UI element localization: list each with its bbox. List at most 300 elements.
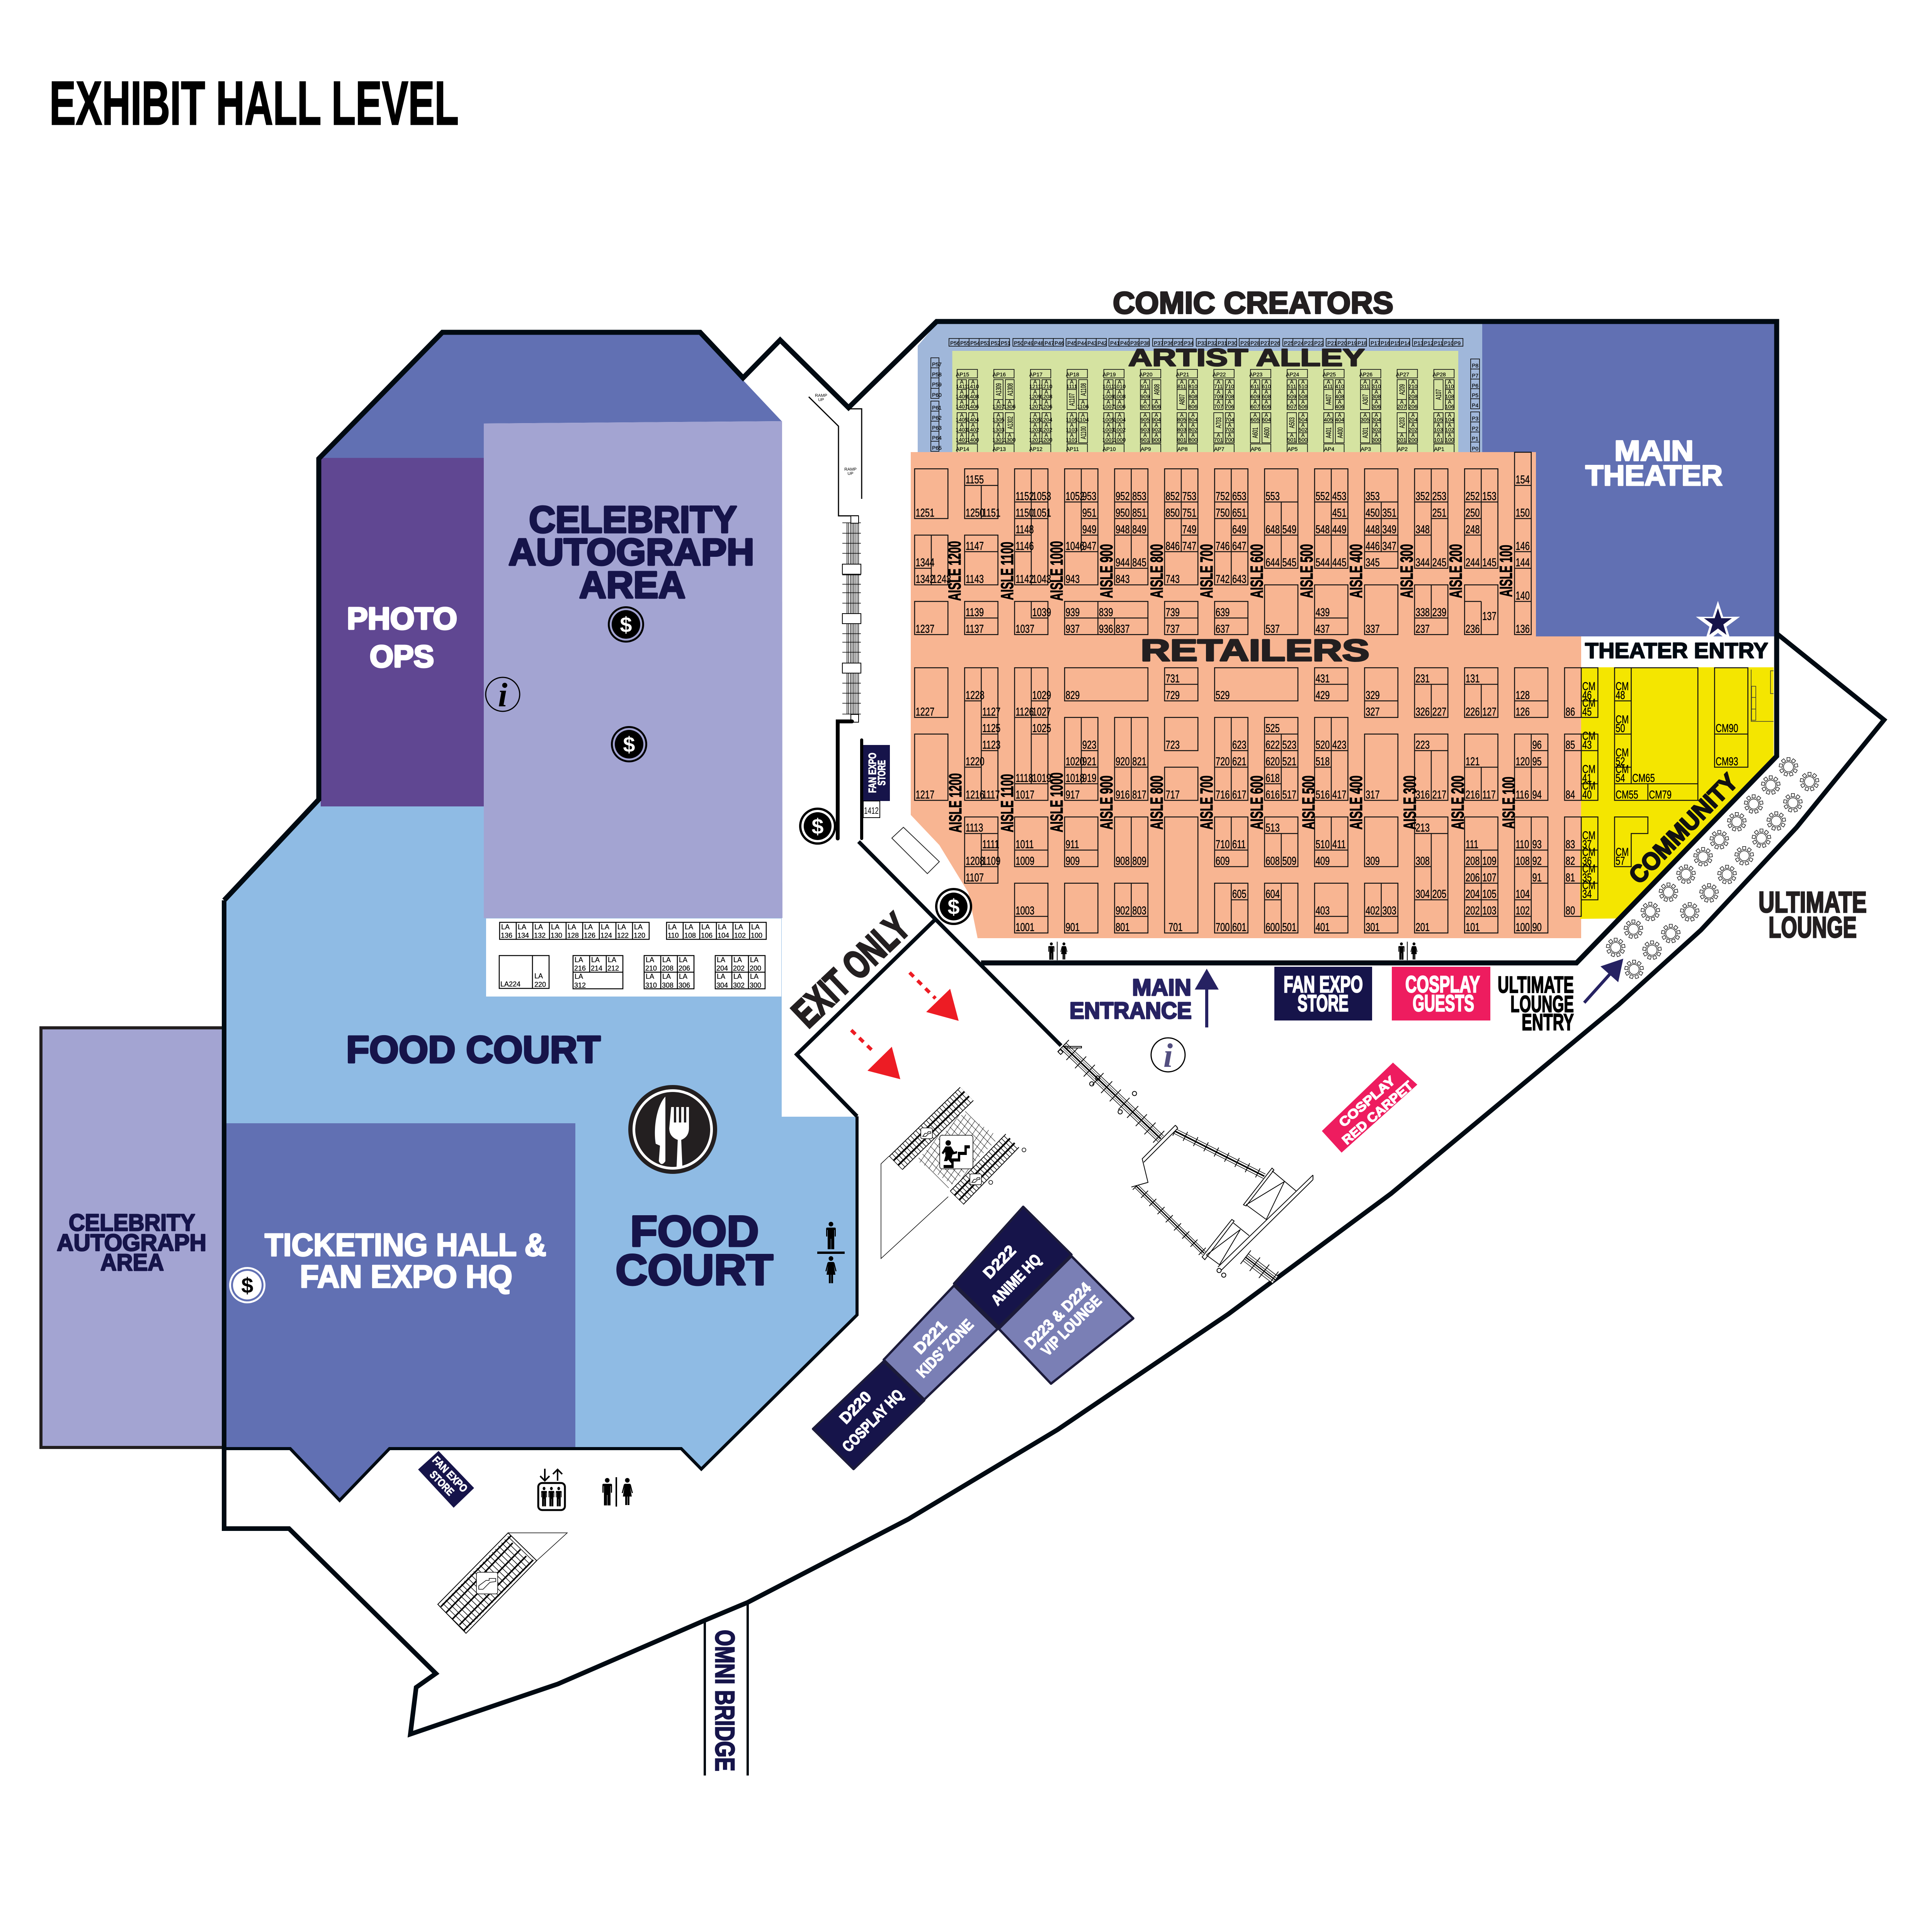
artist alley booths: 702 [1225, 427, 1234, 433]
retailer and community booth numbers: 1151 [982, 507, 1000, 519]
retailer and community booth numbers: 1107 [966, 872, 984, 884]
zone: D220 cosplay hq [813, 1361, 924, 1469]
zone: D223 and D224 vip lounge: D223 & D224 [1022, 1279, 1095, 1352]
P booths row: P34 [1184, 340, 1194, 346]
small community booths at right edge [1751, 670, 1774, 721]
artist alley booths: A [1228, 399, 1232, 405]
artist alley booths: 506 [1298, 403, 1308, 410]
retailer and community booth numbers: 750 [1216, 507, 1230, 519]
retailer and community booth numbers: 423 [1332, 739, 1346, 751]
retailer and community booth numbers: 52 [1616, 756, 1625, 768]
artist alley booths: A [1180, 412, 1184, 418]
P booths row: P49 [1024, 340, 1034, 346]
retailer and community booth numbers: 753 [1182, 490, 1196, 503]
artist alley booths: AP8 [1177, 446, 1188, 452]
panel: photo ops: OPS [370, 639, 434, 673]
artist alley booths: A [1228, 422, 1232, 428]
retailer and community booth numbers: 93 [1532, 838, 1542, 851]
panel: LA booths: LA [662, 956, 671, 964]
retailer and community booth numbers: 620 [1265, 756, 1280, 768]
artist alley booths: 708 [1225, 393, 1234, 400]
panel: LA booths: LA [617, 923, 626, 931]
retailer and community booth numbers: 1025 [1032, 723, 1051, 735]
artist alley booths: A [1033, 412, 1037, 418]
retailer and community booth numbers: 117 [1482, 789, 1496, 801]
artist alley booths: A1107 [1068, 393, 1077, 406]
icon: dollar autograph lower [611, 726, 647, 762]
artist alley booths: A [1290, 399, 1294, 405]
retailer and community booth numbers: 250 [1466, 507, 1480, 519]
retailer and community booth numbers: 131 [1466, 673, 1480, 685]
retailer and community booth numbers: CM [1582, 697, 1595, 709]
retailer and community booth numbers: 621 [1232, 756, 1247, 768]
artist alley booths: A [1143, 389, 1147, 395]
panel: LA booths: LA [733, 956, 742, 964]
artist alley booths: A [960, 422, 964, 428]
P booths row: P38 [1140, 340, 1150, 346]
artist alley booths: A [1118, 422, 1122, 428]
artist alley booths: A [1033, 422, 1037, 428]
artist alley booths: A [1448, 412, 1452, 418]
panel: LA booths: 108 [684, 932, 696, 939]
aisle labels [945, 541, 1519, 833]
panel: LA booths: 216 [574, 964, 586, 972]
retailer and community booth numbers: CM [1582, 830, 1595, 842]
artist alley booths: A [971, 432, 975, 438]
artist alley booths: 105 [1434, 417, 1443, 423]
main entrance structure [1058, 1046, 1313, 1280]
retailer and community booth numbers: 852 [1166, 490, 1180, 503]
sign: fan expo store: STORE [1298, 990, 1349, 1016]
retailer and community booth numbers: 237 [1416, 623, 1430, 635]
retailer and community booth numbers: 1237 [916, 623, 934, 635]
artist alley booths: A [1118, 399, 1122, 405]
retailer and community booth numbers: 146 [1515, 540, 1530, 553]
retailer and community booth numbers: 518 [1316, 756, 1330, 768]
label: ultimate lounge [1759, 886, 1867, 944]
retailer and community booth numbers: 94 [1532, 789, 1542, 801]
P booths row: P0 [1472, 446, 1478, 452]
retailer and community booth numbers: 516 [1316, 789, 1330, 801]
retailer and community booth numbers: 917 [1066, 789, 1080, 801]
retailer and community booth numbers: 1027 [1032, 706, 1051, 718]
zone: D221 kids zone [884, 1286, 998, 1400]
zone: D222 anime hq: D222 [980, 1242, 1019, 1282]
P booths row: P58 [932, 371, 942, 378]
P booths row: P53 [980, 340, 990, 346]
artist alley booths: A [1374, 379, 1378, 385]
retailer and community booth numbers: 1029 [1032, 689, 1051, 702]
retailer and community booth numbers: 717 [1166, 789, 1180, 801]
artist alley booths: 502 [1298, 427, 1308, 433]
retailer and community booth numbers: 1125 [982, 723, 1000, 735]
aisle labels: AISLE 500 [1299, 776, 1318, 830]
artist alley booths: A [1008, 399, 1012, 405]
artist alley booths: 1207 [1029, 403, 1041, 410]
retailer and community booth numbers: 944 [1116, 557, 1130, 569]
panel: LA booths: LA [750, 973, 759, 980]
artist alley booths: A [1253, 389, 1257, 395]
label: ultimate lounge entry: ENTRY [1522, 1009, 1574, 1035]
artist alley booths: AP16 [993, 371, 1006, 378]
artist alley booths: A [1191, 389, 1195, 395]
artist alley booths: A [1191, 422, 1195, 428]
artist alley booths: 1204 [1040, 417, 1053, 423]
panel: ticketing hall: TICKETING HALL & [265, 1227, 546, 1263]
retailer and community booth numbers: 353 [1366, 490, 1380, 503]
P booths row: P37 [1154, 340, 1163, 346]
artist alley booths: A [1411, 422, 1415, 428]
artist alley booths: A [1044, 399, 1048, 405]
retailer and community booth numbers: 525 [1265, 723, 1280, 735]
retailer and community booth numbers: 616 [1265, 789, 1280, 801]
P booths row: P8 [1472, 362, 1478, 369]
retailer and community booth numbers: 245 [1432, 557, 1446, 569]
artist alley booths: 507 [1287, 403, 1296, 410]
artist alley booths: A [1191, 412, 1195, 418]
panel: LA booths: 102 [734, 932, 746, 939]
artist alley booths: 805 [1177, 417, 1186, 423]
aisle labels: AISLE 200 [1448, 776, 1468, 830]
retailer and community booth numbers: 153 [1482, 490, 1497, 503]
retailer and community booth numbers: 548 [1316, 524, 1330, 536]
artist alley booths: A [1290, 432, 1294, 438]
artist alley booths: A301 [1362, 427, 1370, 438]
artist alley booths: 1111 [1066, 383, 1077, 389]
artist alley booths: AP2 [1398, 446, 1408, 452]
artist alley booths: 1402 [967, 427, 979, 433]
panel: left celebrity autograph area: CELEBRITY [69, 1209, 195, 1236]
retailer and community booth numbers: 345 [1366, 557, 1380, 569]
artist alley booths: 1303 [992, 427, 1005, 433]
retailer and community booth numbers: 244 [1466, 557, 1480, 569]
P booths row: P24 [1294, 340, 1304, 346]
artist alley booths: 1003 [1102, 427, 1114, 433]
artist alley booths: A [1033, 379, 1037, 385]
retailer and community booth numbers: 809 [1132, 855, 1146, 867]
artist alley booths: 504 [1298, 417, 1308, 423]
panel: LA booths: LA [601, 923, 609, 931]
panel: LA booths: 110 [668, 932, 679, 939]
panel: LA booths: LA [551, 923, 560, 931]
artist alley booths: A [1143, 379, 1147, 385]
artist alley booths: 210 [1408, 383, 1418, 389]
artist alley booths: A [960, 412, 964, 418]
panel: LA booths: 128 [567, 932, 579, 939]
retailer and community booth numbers: 36 [1582, 855, 1592, 867]
retailer and community booth numbers: 846 [1166, 540, 1180, 553]
artist alley booths: 500 [1298, 437, 1308, 443]
retailer and community booth numbers: 1344 [916, 557, 934, 569]
artist alley booths: A [1253, 379, 1257, 385]
artist alley booths: A [997, 399, 1000, 405]
arrow: main entrance [1195, 969, 1219, 1027]
artist alley booths: 1205 [1029, 417, 1041, 423]
artist alley booths: AP7 [1214, 446, 1225, 452]
artist alley booths: 1409 [956, 393, 968, 400]
exit only label: EXIT ONLY [784, 905, 918, 1036]
panel: photo ops: PHOTO [347, 601, 457, 636]
artist alley booths: 1406 [967, 403, 979, 410]
P booths row: P46 [1054, 340, 1064, 346]
retailer and community booth numbers: 651 [1232, 507, 1247, 519]
artist alley booths: 707 [1214, 403, 1223, 410]
retailer and community booth numbers: 301 [1366, 922, 1380, 934]
retailer and community booth numbers: 647 [1232, 540, 1247, 553]
panel: LA booths: 206 [679, 964, 690, 972]
retailer and community booth numbers: 1113 [966, 822, 983, 834]
artist alley booths: A107 [1435, 389, 1443, 400]
artist alley booths: A [1374, 422, 1378, 428]
artist alley booths: 900 [1152, 437, 1161, 443]
panel: LA booths: 212 [607, 964, 619, 972]
retailer and community booth numbers: 1123 [982, 739, 1000, 751]
retailer and community booth numbers: 239 [1432, 606, 1446, 619]
artist alley booths: 1407 [956, 403, 968, 410]
P booths row: P36 [1164, 340, 1173, 346]
artist alley booths: A400 [1337, 427, 1345, 438]
retailer and community booth numbers: 446 [1366, 540, 1380, 553]
artist alley booths: 302 [1372, 427, 1381, 433]
retailer and community booth numbers: 611 [1232, 838, 1246, 851]
panel: retailers floor [911, 452, 1581, 938]
ramp and stairs: RAMP [844, 467, 857, 472]
artist alley booths: 1410 [967, 383, 979, 389]
artist alley booths: AP18 [1066, 371, 1079, 378]
artist alley booths: A [1301, 399, 1305, 405]
retailer and community booth numbers: 509 [1282, 855, 1296, 867]
artist alley booths: A [1217, 399, 1221, 405]
artist alley booths: A407 [1325, 394, 1333, 405]
artist alley booths: AP10 [1102, 446, 1116, 452]
retailer and community booth numbers: 701 [1168, 922, 1183, 934]
panel: LA booths: 132 [534, 932, 546, 939]
artist alley booths: A [1265, 412, 1269, 418]
panel: LA booths: 134 [517, 932, 529, 939]
panel: celebrity autograph area: AREA [579, 564, 685, 606]
artist alley booths [956, 369, 1454, 452]
retailer and community booth numbers: 1043 [1032, 573, 1051, 585]
retailer and community booth numbers: 351 [1382, 507, 1396, 519]
P booths row: P21 [1327, 340, 1337, 346]
retailer and community booth numbers: CM90 [1716, 723, 1738, 735]
artist alley booths: 804 [1189, 417, 1197, 423]
P booths row: P6 [1472, 383, 1478, 389]
P booths row: P29 [1240, 340, 1250, 346]
artist alley booths: A [1191, 432, 1195, 438]
P booths row: P1 [1472, 435, 1478, 442]
artist alley booths: A [1044, 379, 1048, 385]
artist alley booths: A [1265, 379, 1269, 385]
retailer and community booth numbers: 431 [1316, 673, 1330, 685]
artist alley booths: A908 [1153, 384, 1162, 395]
panel: LA booths: 124 [600, 932, 612, 939]
retailer and community booth numbers: 251 [1432, 507, 1446, 519]
retailer and community booth numbers: 95 [1532, 756, 1542, 768]
retailer and community booth numbers: CM [1582, 764, 1595, 776]
retailer and community booth numbers: 544 [1316, 557, 1330, 569]
retailer and community booth numbers: 84 [1566, 789, 1575, 801]
artist alley booths: 202 [1408, 427, 1418, 433]
retailer and community booth numbers: 304 [1416, 888, 1430, 901]
artist alley booths: A [1155, 399, 1158, 405]
retailer and community booth numbers: 92 [1532, 855, 1542, 867]
retailer and community booth numbers: 537 [1265, 623, 1280, 635]
retailer and community booth numbers: 308 [1416, 855, 1430, 867]
artist alley booths: 1306 [1003, 403, 1016, 410]
retailer and community booth numbers: 850 [1166, 507, 1180, 519]
retailer and community booth numbers: 951 [1082, 507, 1096, 519]
artist alley booths: 1208 [1040, 393, 1053, 400]
label: ultimate lounge entry: LOUNGE [1510, 991, 1574, 1017]
retailer and community booth numbers: 253 [1432, 490, 1446, 503]
fan expo store sign upper: FAN EXPO [866, 753, 878, 793]
retailer and community booth numbers: 743 [1166, 573, 1180, 585]
artist alley booths: A [1374, 399, 1378, 405]
aisle labels: AISLE 600 [1247, 776, 1267, 830]
P booths row: P4 [1472, 402, 1478, 408]
P booths row: P22 [1314, 340, 1324, 346]
artist alley booths: 406 [1335, 403, 1344, 410]
artist alley booths: A703 [1215, 417, 1223, 428]
artist alley booths: 305 [1361, 417, 1370, 423]
artist alley booths: 510 [1298, 383, 1308, 389]
panel: LA booths: 208 [662, 964, 673, 972]
retailer and community booth numbers: 127 [1482, 706, 1497, 718]
retailer and community booth numbers: 1052 [1066, 490, 1084, 503]
panel: LA booths: LA [679, 973, 687, 980]
retailer and community booth numbers: 208 [1466, 855, 1480, 867]
artist alley booths: A [1081, 399, 1085, 405]
artist alley booths: A1100 [1080, 427, 1088, 439]
artist alley booths: 1004 [1114, 417, 1126, 423]
panel: LA booths: 202 [733, 964, 745, 972]
main escalators [881, 1087, 1026, 1259]
zone: D221 kids zone: D221 [911, 1317, 950, 1357]
panel: LA booths: LA [679, 956, 687, 964]
artist alley booths: A [1437, 432, 1440, 438]
retailer and community booth numbers: 644 [1265, 557, 1280, 569]
artist alley booths: AP14 [956, 446, 969, 452]
retailer and community booth numbers: 1143 [966, 573, 984, 585]
retailer and community booth numbers: CM93 [1716, 756, 1738, 768]
artist alley booths: A [1290, 379, 1294, 385]
retailer and community booth numbers: 429 [1316, 689, 1330, 702]
retailer and community booth numbers: 604 [1265, 888, 1280, 901]
retailer and community booth numbers: 948 [1116, 524, 1130, 536]
icon: info autograph [486, 677, 520, 714]
P booths row: P23 [1304, 340, 1314, 346]
artist alley booths: 404 [1335, 417, 1344, 423]
retailer and community booth numbers: 140 [1515, 590, 1530, 602]
panel: main theater: MAIN [1614, 435, 1694, 467]
retailer and community booth numbers: CM [1582, 863, 1595, 875]
retailer and community booth numbers: 145 [1482, 557, 1497, 569]
panel: LA booths: LA [750, 956, 759, 964]
retailer and community booth numbers: 409 [1316, 855, 1330, 867]
retailer and community booth numbers: 352 [1416, 490, 1430, 503]
aisle labels: AISLE 900 [1097, 776, 1116, 830]
panel: LA booths: 304 [716, 981, 728, 989]
retailer and community booth numbers: 1118 [1015, 772, 1033, 784]
artist alley booths: 1200 [1040, 437, 1053, 443]
panel: ticketing hall [226, 1123, 575, 1500]
P booths row: P18 [1357, 340, 1367, 346]
retailer and community booth numbers: 1227 [916, 706, 934, 718]
artist alley booths: 905 [1141, 417, 1150, 423]
P booths row: P5 [1472, 392, 1478, 398]
booth 1412: 1412 [864, 806, 879, 816]
retailer and community booth numbers: 402 [1366, 905, 1380, 917]
artist alley booths: 810 [1189, 383, 1197, 389]
retailer and community booth numbers: 105 [1482, 888, 1497, 901]
P booths row: P57 [932, 361, 942, 367]
aisle labels: AISLE 500 [1297, 544, 1316, 598]
artist alley booths: A [1155, 432, 1158, 438]
retailer and community booth numbers: 417 [1332, 789, 1346, 801]
panel: LA booths: LA [501, 923, 510, 931]
artist alley booths: AP21 [1176, 371, 1189, 378]
artist alley booths: 1403 [956, 427, 968, 433]
artist alley booths: 408 [1335, 393, 1344, 400]
retailer and community booth numbers: 1243 [932, 573, 951, 585]
artist alley booths: A [997, 412, 1000, 418]
panel: main theater: THEATER [1585, 459, 1723, 492]
artist alley booths: A [1217, 432, 1221, 438]
zone: D223 and D224 vip lounge: VIP LOUNGE [1038, 1292, 1105, 1359]
icon: dollar retailers: $ [947, 895, 960, 919]
icon: food court fork and knife [628, 1085, 717, 1174]
retailer and community booth numbers: 337 [1366, 623, 1380, 635]
retailer and community booth numbers: CM79 [1649, 789, 1672, 801]
retailer and community booth numbers: 236 [1466, 623, 1480, 635]
panel: LA booths: 210 [645, 964, 657, 972]
artist alley booths: A [1374, 412, 1378, 418]
artist alley booths: A1309 [995, 383, 1003, 396]
retailer and community booth numbers: 919 [1082, 772, 1096, 784]
aisle labels: AISLE 800 [1147, 776, 1167, 830]
artist alley booths: A [1070, 412, 1074, 418]
retailer and community booth numbers: CM55 [1616, 789, 1638, 801]
retailer and community booth numbers: 1155 [966, 474, 984, 486]
artist alley booths: 906 [1152, 403, 1161, 410]
icon: dollar ticketing: $ [241, 1273, 253, 1298]
artist alley booths: AP3 [1361, 446, 1371, 452]
artist alley booths: A [971, 399, 975, 405]
artist alley booths: 204 [1408, 417, 1418, 423]
artist alley booths: 411 [1324, 383, 1333, 389]
artist alley booths: A [1118, 389, 1122, 395]
retailer and community booth numbers: 639 [1216, 606, 1230, 619]
retailer and community booth numbers: 120 [1515, 756, 1530, 768]
label: main entrance: ENTRANCE [1070, 998, 1192, 1024]
P booths row: P2 [1472, 425, 1478, 432]
aisle labels: AISLE 600 [1247, 544, 1267, 598]
artist alley booths: AP25 [1323, 371, 1336, 378]
retailer and community booth numbers: 817 [1132, 789, 1146, 801]
retailer and community booth numbers: 513 [1265, 822, 1280, 834]
artist alley booths: 102 [1445, 427, 1454, 433]
panel: LA booths: 300 [750, 981, 761, 989]
retailer and community booth numbers: 1003 [1015, 905, 1034, 917]
panel: community floor [1580, 667, 1774, 919]
artist alley booths: 1411 [956, 383, 968, 389]
artist alley booths: A [1143, 412, 1147, 418]
retailer and community booth numbers: 510 [1316, 838, 1330, 851]
retailer and community booth numbers: 837 [1116, 623, 1130, 635]
artist alley booths: 1011 [1103, 383, 1114, 389]
P booths row: P33 [1197, 340, 1207, 346]
